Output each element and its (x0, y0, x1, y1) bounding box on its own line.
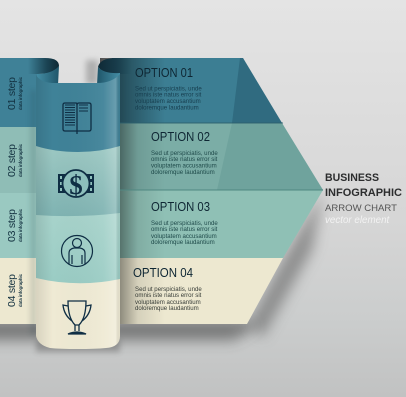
step label 04: 04 step (6, 274, 18, 307)
column shadow (31, 90, 36, 335)
curl left (28, 58, 59, 85)
option 04 block (133, 265, 202, 312)
option 01 block: omnis iste natus error sit (135, 92, 202, 98)
step label 01: 01 step (6, 77, 18, 110)
option 03 block: omnis iste natus error sit (151, 226, 218, 233)
column band 1 (36, 74, 120, 152)
step label 02: data infographic (18, 143, 23, 177)
option 02 block: Sed ut perspiciatis, unde (151, 150, 218, 157)
step band 01 (0, 58, 38, 128)
icon: trophy (63, 301, 91, 334)
option 01 block (135, 65, 202, 112)
icon: dollar coin (58, 170, 94, 200)
arrow band 3 (120, 190, 323, 258)
option 03 block: Sed ut perspiciatis, unde (151, 220, 218, 227)
step label 04: data infographic (18, 273, 23, 307)
option 02 block: voluptatem accusantium (151, 162, 217, 170)
shadows (0, 60, 323, 352)
step band 03 (0, 193, 38, 258)
subheading: vector element: vector element (325, 215, 391, 226)
step label 03: data infographic (18, 208, 23, 242)
icon: person badge (62, 236, 92, 266)
option 04 block: doloremque laudantium (135, 305, 199, 312)
panel: curls at top (28, 58, 132, 85)
column band 3 (36, 205, 120, 283)
step label 03 (6, 208, 23, 242)
curl right (97, 58, 132, 85)
step label 03: 03 step (6, 209, 18, 242)
icon: dollar coin: $ (69, 170, 83, 200)
option 01 block: OPTION 01 (135, 65, 193, 80)
option 04 block: Sed ut perspiciatis, unde (135, 286, 202, 293)
option 01 block: voluptatem accusantium (135, 98, 201, 105)
option 01 block: Sed ut perspiciatis, unde (135, 86, 202, 92)
step label 01: data infographic (18, 76, 23, 110)
option 03 block: OPTION 03 (151, 199, 210, 214)
arrow band 2 (120, 123, 323, 190)
option 04 block: voluptatem accusantium (135, 299, 201, 306)
column shading (36, 74, 120, 349)
panel: central column (31, 74, 120, 349)
option 02 block: omnis iste natus error sit (151, 156, 218, 163)
icon: book (63, 103, 91, 134)
arrow band 1 (112, 58, 282, 123)
option 01 block: doloremque laudantium (135, 104, 199, 112)
subheading: arrow chart: ARROW CHART (325, 203, 397, 213)
panel: left step strips (0, 58, 38, 324)
option 02 block (151, 129, 218, 176)
step band 04 (0, 258, 38, 324)
option 02 block: OPTION 02 (151, 129, 210, 144)
option 04 block: OPTION 04 (133, 265, 193, 280)
panel: arrow chart (100, 58, 323, 324)
heading: business infographic: BUSINESS (325, 172, 379, 184)
option 03 block (151, 199, 218, 246)
step label 04 (6, 273, 23, 307)
column band 2 (36, 140, 120, 216)
step label 02: 02 step (6, 144, 18, 177)
step label 01 (6, 76, 23, 110)
heading: business infographic: INFOGRAPHIC (325, 187, 402, 199)
option 03 block: doloremque laudantium (151, 239, 215, 246)
column band 4 (36, 270, 120, 349)
step label 02 (6, 143, 23, 177)
heading: business infographic (325, 172, 402, 226)
option 04 block: omnis iste natus error sit (135, 292, 202, 299)
step band 02 (0, 127, 38, 193)
option 03 block: voluptatem accusantium (151, 233, 217, 240)
option 02 block: doloremque laudantium (151, 169, 215, 176)
arrow band 4 (120, 258, 283, 324)
